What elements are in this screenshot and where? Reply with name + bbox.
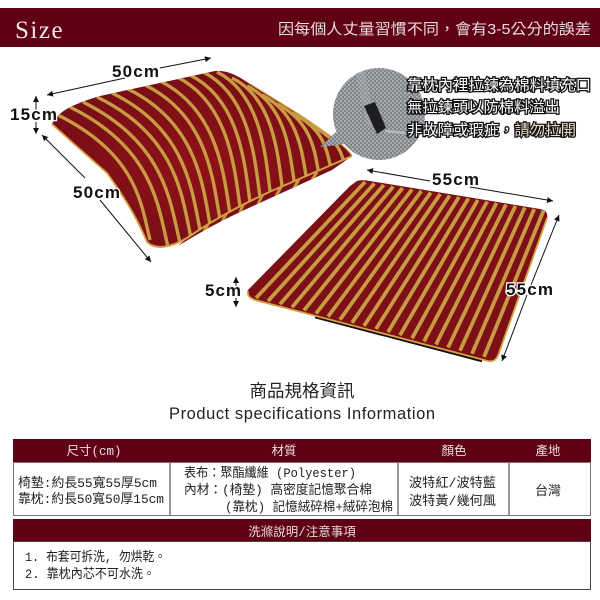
cushion height dimension <box>205 277 241 307</box>
care body: 1. 布套可拆洗, 勿烘乾。 <box>25 549 166 565</box>
zipper note text <box>407 77 591 139</box>
care body <box>14 542 590 590</box>
material cell: (靠枕) 記憶絨碎棉+絨碎泡棉 <box>225 499 393 515</box>
section title <box>169 381 435 423</box>
zipper detail inset <box>320 68 425 160</box>
table header row: 尺寸(cm) <box>66 444 122 459</box>
material cell: 內材：(椅墊) 高密度記憶聚合棉 <box>184 482 372 498</box>
heading: Size: Size <box>15 17 64 44</box>
cushion depth dimension <box>502 215 559 361</box>
cushion width dimension: 55cm <box>432 170 479 189</box>
pillow height dimension: 15cm <box>10 105 57 124</box>
seat cushion illustration <box>247 180 547 361</box>
size cell <box>18 475 164 507</box>
material cell <box>184 466 393 515</box>
pillow height dimension <box>10 96 57 134</box>
table body frame <box>14 462 590 516</box>
zipper note text: 靠枕內裡拉鍊為棉料填充口 <box>407 77 591 94</box>
care body: 2. 靠枕內芯不可水洗。 <box>25 567 155 582</box>
material cell: 表布：聚酯纖維 (Polyester) <box>184 466 356 481</box>
colour cell: 波特黃/幾何風 <box>409 493 496 509</box>
zipper note text: 非故障或瑕疵，請勿拉開 <box>407 121 576 139</box>
origin cell: 台灣 <box>535 484 561 499</box>
cushion depth dimension: 55cm <box>506 280 553 299</box>
pillow illustration <box>52 71 352 247</box>
pillow width dimension <box>47 58 211 95</box>
colour cell <box>409 476 496 509</box>
specification table <box>13 439 591 516</box>
pillow depth dimension <box>42 135 151 262</box>
size cell: 靠枕:約長50寬50厚15cm <box>18 491 164 507</box>
pillow width dimension: 50cm <box>112 62 159 81</box>
table header row: 顏色 <box>441 443 467 459</box>
zipper note text: 無拉鍊頭以防棉料溢出 <box>407 99 560 116</box>
section title: Product specifications Information <box>169 405 435 423</box>
table header row <box>13 439 591 462</box>
table header row: 材質 <box>271 443 297 459</box>
header banner <box>0 8 600 47</box>
colour cell: 波特紅/波特藍 <box>409 476 496 491</box>
table header row: 產地 <box>535 443 561 459</box>
care header: 洗滌說明/注意事項 <box>248 524 356 540</box>
size tolerance note: 因每個人丈量習慣不同，會有3-5公分的誤差 <box>278 20 591 38</box>
care instructions <box>13 519 591 590</box>
size cell: 椅墊:約長55寬55厚5cm <box>18 475 157 491</box>
care header <box>13 519 591 541</box>
pillow depth dimension: 50cm <box>73 183 120 202</box>
section title: 商品規格資訊 <box>250 381 354 401</box>
cushion width dimension <box>367 170 553 201</box>
cushion height dimension: 5cm <box>205 281 241 300</box>
